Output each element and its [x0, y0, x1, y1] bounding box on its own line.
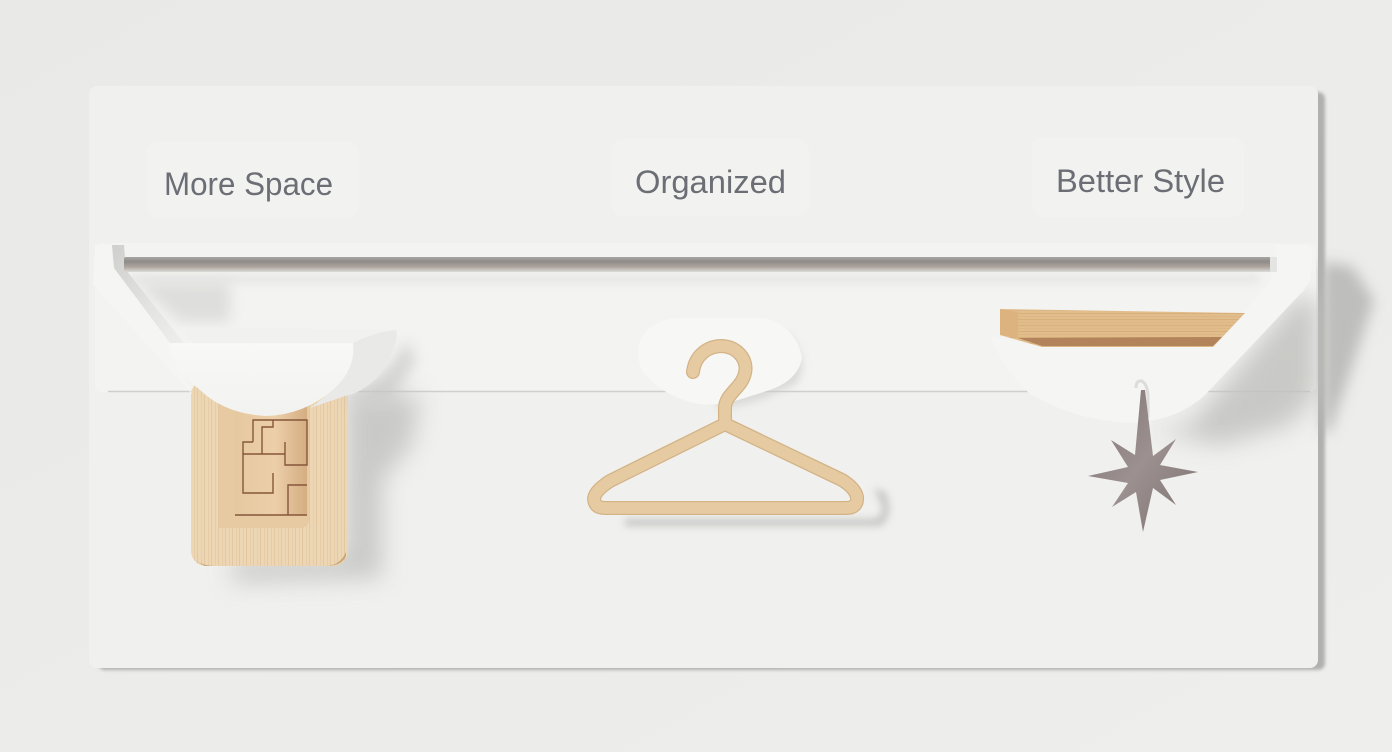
icon: right bracket and bowl: [990, 245, 1318, 445]
icon: hanger soft shadow: [625, 488, 889, 526]
bowl cast shadow: [1150, 295, 1318, 445]
bracket arm: [93, 245, 192, 394]
icon: clothes hanger: [594, 346, 857, 508]
icon: left bracket and bowl: [93, 245, 416, 416]
board edge shadow: [98, 92, 1325, 670]
label: Organized: Organized: [635, 164, 786, 200]
bowl cast shadow: [340, 340, 416, 405]
label: Organized: [611, 139, 809, 216]
block shadow: [232, 395, 420, 582]
recess shadow: [135, 282, 230, 322]
shadow under rail: [130, 274, 1260, 284]
icon: hanger mount oval: [638, 318, 802, 410]
icon: wooden floor plan block: [191, 380, 420, 582]
star: [1088, 390, 1198, 532]
rail: metal rod: [124, 257, 1277, 272]
bowl front: [168, 343, 353, 416]
wall shadow right of bracket: [1322, 262, 1374, 432]
icon: silver star charm: [1088, 381, 1198, 532]
label: More Space: [147, 141, 359, 218]
label: More Space: More Space: [164, 166, 333, 202]
bowl interior: [180, 327, 395, 343]
label: Better Style: Better Style: [1056, 163, 1225, 199]
panel: rail band: [95, 243, 1316, 392]
bracket inner face: [112, 245, 184, 343]
wood shelf: [1000, 309, 1245, 347]
block inset: [219, 392, 309, 528]
panel: white board: [89, 86, 1325, 670]
bowl wing: [310, 330, 397, 408]
floor plan lines: [235, 420, 307, 515]
hook: [1136, 381, 1148, 417]
label: Better Style: [1032, 137, 1244, 217]
